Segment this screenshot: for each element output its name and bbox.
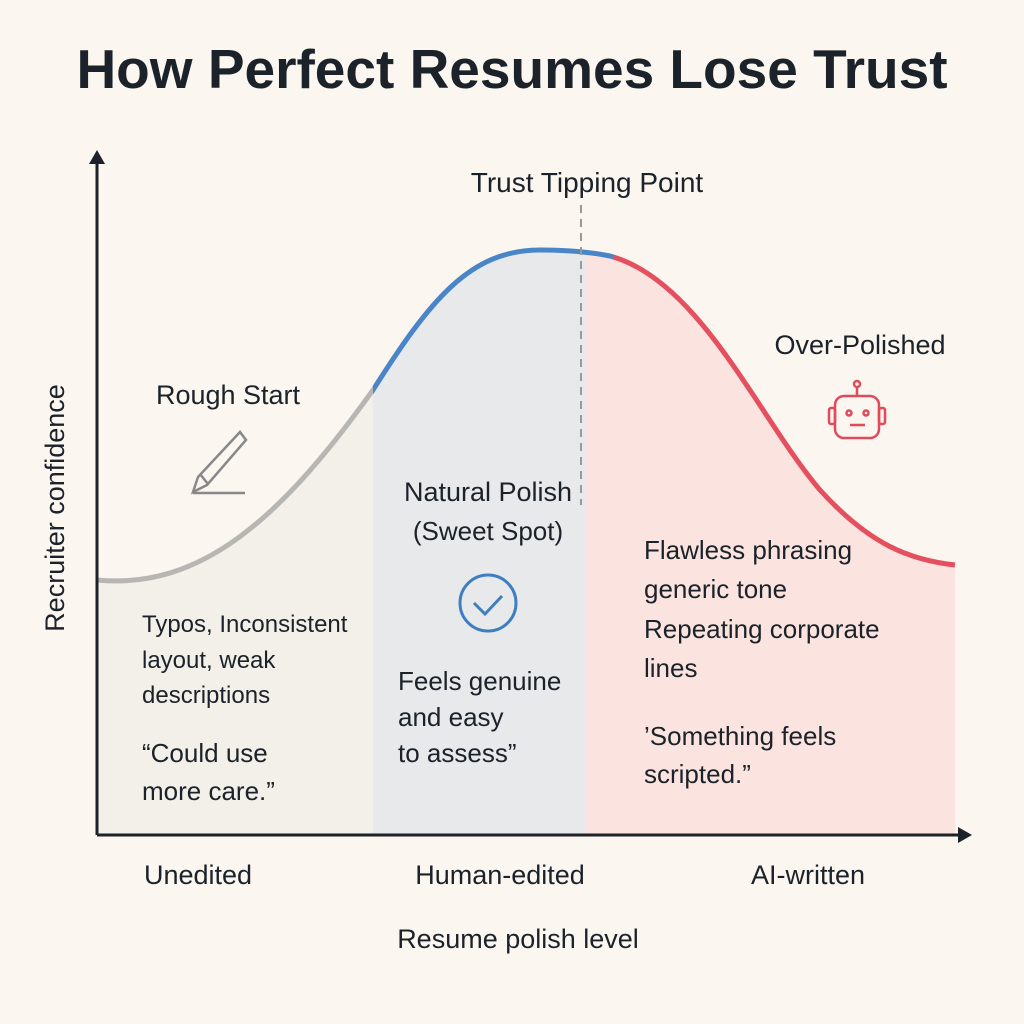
over-polished text: lines: [644, 653, 697, 683]
icon: check circle: [460, 575, 516, 631]
rough start text: more care.”: [142, 776, 275, 806]
x tick labels: AI-written: [751, 860, 865, 890]
rough start text: layout, weak: [142, 647, 276, 674]
rough start text: [142, 611, 348, 806]
natural polish text: Feels genuine: [398, 666, 561, 696]
region fills: [373, 252, 955, 834]
rough start text: “Could use: [142, 738, 268, 768]
over-polished text: Flawless phrasing: [644, 535, 852, 565]
rough start text: descriptions: [142, 682, 270, 709]
x tick labels: Unedited: [144, 860, 252, 890]
tipping point label: Trust Tipping Point: [471, 167, 703, 198]
x tick labels: Human-edited: [415, 860, 585, 890]
over-polished text: Repeating corporate: [644, 614, 880, 644]
y axis label: Recruiter confidence: [40, 384, 70, 632]
rough start label: Rough Start: [156, 380, 301, 410]
natural polish text: and easy: [398, 702, 504, 732]
over-polished label: Over-Polished: [774, 330, 946, 360]
over-polished text: [644, 535, 880, 789]
icon: robot: [829, 381, 885, 438]
axes: [89, 150, 972, 843]
tipping point dashed line: [580, 205, 582, 505]
natural polish label: Natural Polish: [404, 477, 572, 507]
trust curve: [97, 250, 955, 581]
natural polish text: to assess”: [398, 738, 516, 768]
over-polished text: scripted.”: [644, 759, 751, 789]
natural polish text: [398, 666, 561, 768]
icon: pencil: [193, 432, 246, 493]
x axis label: Resume polish level: [397, 924, 639, 954]
rough start text: Typos, Inconsistent: [142, 611, 348, 638]
x tick labels: [144, 860, 865, 890]
over-polished text: generic tone: [644, 574, 787, 604]
text: (Sweet Spot): [413, 516, 563, 546]
over-polished text: ’Something feels: [644, 721, 836, 751]
title: How Perfect Resumes Lose Trust: [76, 38, 948, 100]
